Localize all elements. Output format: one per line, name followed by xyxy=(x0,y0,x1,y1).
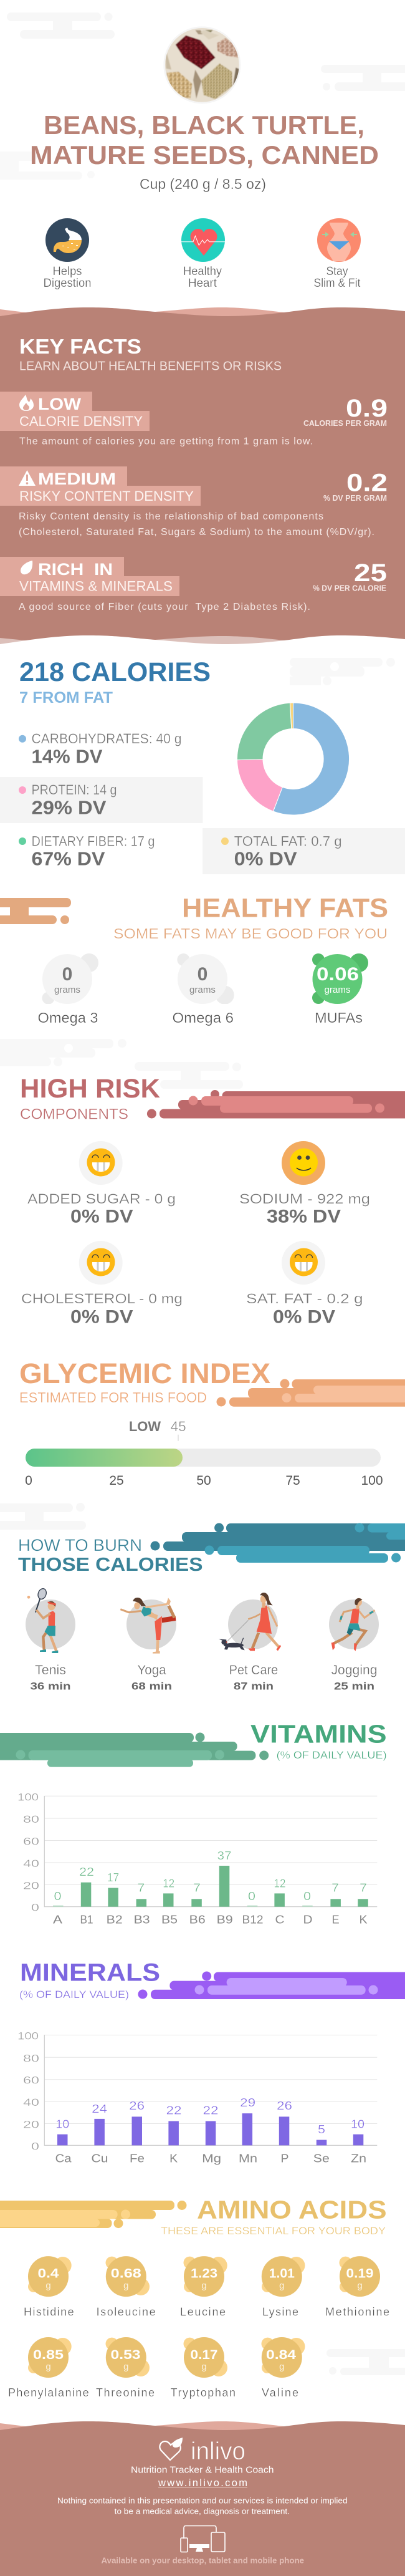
stat: sodium: SODIUM - 922 mg xyxy=(239,1191,370,1207)
chart: vitamins bar chart: 80 xyxy=(23,1813,39,1825)
heading: glycemic index: GLYCEMIC INDEX xyxy=(19,1358,270,1389)
fact: medium risky content density xyxy=(0,466,388,538)
stat: added sugar: ADDED SUGAR - 0 g xyxy=(27,1191,176,1207)
label: yoga xyxy=(131,1663,172,1692)
stat: omega 6 xyxy=(172,953,234,1026)
decorative banner: minerals xyxy=(138,1972,405,1999)
amino acid: histidine: g xyxy=(45,2280,51,2291)
chart: vitamins bar chart: 12 xyxy=(163,1878,174,1890)
fact: medium risky content density: Risky Content density is the relationship of bad components xyxy=(19,511,323,522)
label: jogging: 25 min xyxy=(334,1680,374,1692)
title xyxy=(30,110,379,170)
decorative banner: healthy fats xyxy=(0,898,71,924)
heading: how to burn: HOW TO BURN xyxy=(18,1536,142,1555)
activity: pet care xyxy=(219,1593,281,1651)
amino acid: phenylalanine: g xyxy=(45,2361,51,2372)
logo: heart and leaf xyxy=(160,2438,183,2460)
amino acid: histidine: Histidine xyxy=(24,2305,74,2318)
amino acid: methionine xyxy=(325,2256,389,2318)
decorative banner: burn xyxy=(151,1523,405,1563)
chart: minerals bar chart: 10 xyxy=(55,2118,69,2131)
chart: minerals bar chart: Mn xyxy=(239,2153,257,2165)
icon: smiling face xyxy=(290,1149,318,1176)
label: pet care: 87 min xyxy=(234,1680,274,1692)
chart: vitamins bar chart: B9 xyxy=(217,1914,233,1926)
tagline: Nutrition Tracker & Health Coach xyxy=(131,2465,274,2476)
chart: minerals bar chart: 10 xyxy=(351,2118,364,2131)
stat: carbohydrates: 14% DV xyxy=(31,746,103,768)
fact: medium risky content density: % DV PER GRAM xyxy=(323,494,387,503)
decorative banner: amino acids xyxy=(0,2201,187,2228)
chart: vitamins bar chart: 7 xyxy=(360,1882,367,1894)
chart: minerals bar chart: Ca xyxy=(55,2153,72,2165)
stat: saturated fat: SAT. FAT - 0.2 g xyxy=(246,1291,363,1306)
chart: vitamins bar chart: D xyxy=(303,1914,313,1926)
stat: omega 3 xyxy=(37,953,98,1026)
chart: vitamins bar chart: 7 xyxy=(137,1882,145,1894)
label: tennis xyxy=(30,1663,71,1692)
heading: healthy fats: HEALTHY FATS xyxy=(182,893,388,923)
chart: vitamins bar chart: B1 xyxy=(80,1914,93,1926)
label: pet care: Pet Care xyxy=(229,1663,278,1677)
amino acid: phenylalanine: Phenylalanine xyxy=(8,2386,89,2399)
amino acid: methionine: Methionine xyxy=(325,2305,389,2318)
stat: protein xyxy=(0,777,203,823)
chart: glycemic index gauge: 75 xyxy=(285,1474,300,1488)
label: jogging: Jogging xyxy=(331,1663,378,1677)
fact: low calorie density xyxy=(0,392,388,446)
chart: minerals bar chart: 26 xyxy=(129,2100,145,2112)
fact: low calorie density: 0.9 xyxy=(346,395,388,422)
activity: jogging xyxy=(329,1598,379,1651)
amino acid: lysine: g xyxy=(279,2280,284,2291)
chart: minerals bar chart: 40 xyxy=(23,2096,39,2108)
stat: protein: PROTEIN: 14 g xyxy=(31,782,117,798)
amino acid: phenylalanine: 0.85 xyxy=(33,2348,64,2362)
activity: yoga xyxy=(120,1598,176,1654)
fact: medium risky content density: RISKY CONTENT DENSITY xyxy=(19,488,194,504)
stat: omega 6: 0 xyxy=(198,964,207,985)
note: availability: Available on your desktop, tablet and mobile phone xyxy=(101,2556,304,2565)
fact: medium risky content density: MEDIUM xyxy=(38,470,116,488)
serving size: Cup (240 g / 8.5 oz) xyxy=(140,176,266,192)
amino acid: tryptophan: g xyxy=(201,2361,207,2372)
chart: minerals bar chart: K xyxy=(169,2153,178,2165)
chart: minerals bar chart: Mg xyxy=(202,2153,221,2165)
stat: carbohydrates xyxy=(19,731,182,768)
amino acid: leucine: Leucine xyxy=(180,2305,226,2318)
decorative banner: glycemic index xyxy=(217,1379,405,1407)
stat: omega 3: Omega 3 xyxy=(37,1010,98,1026)
chart: vitamins bar chart: 0 xyxy=(31,1902,39,1914)
heading: those calories: THOSE CALORIES xyxy=(18,1553,203,1575)
fact: rich in vitamins and minerals: VITAMINS & MINERALS xyxy=(19,579,173,594)
chart: minerals bar chart: 5 xyxy=(318,2123,325,2136)
amino acid: tryptophan: 0.17 xyxy=(191,2348,218,2362)
stat: carbohydrates: CARBOHYDRATES: 40 g xyxy=(31,731,182,746)
chart: vitamins bar chart xyxy=(17,1791,377,1926)
decorative cloud: burn xyxy=(0,1503,86,1530)
fact: low calorie density: CALORIE DENSITY xyxy=(19,413,143,429)
chart: vitamins bar chart: 20 xyxy=(23,1879,39,1891)
panel: footer xyxy=(0,2421,405,2576)
chart: minerals bar chart: 24 xyxy=(92,2103,107,2115)
amino acid: valine: Valine xyxy=(262,2386,298,2399)
label: helps digestion: Digestion xyxy=(44,277,91,290)
label: healthy heart: Healthy xyxy=(183,265,222,278)
website link: www.inlivo.com xyxy=(158,2477,247,2489)
chart: vitamins bar chart: B6 xyxy=(189,1914,206,1926)
chart: minerals bar chart: 29 xyxy=(240,2096,255,2109)
disclaimer: Nothing contained in this presentation and our services is intended or implied xyxy=(57,2497,348,2506)
label: stay slim and fit: Slim & Fit xyxy=(314,277,361,290)
heading: vitamins: VITAMINS xyxy=(250,1719,387,1748)
amino acid: histidine xyxy=(24,2256,74,2318)
chart: minerals bar chart: 20 xyxy=(23,2119,39,2130)
stat: protein: 29% DV xyxy=(31,797,107,819)
disclaimer: to be a medical advice, diagnosis or treatment. xyxy=(115,2507,290,2516)
stat: total fat xyxy=(202,828,405,874)
chart: glycemic index gauge: 50 xyxy=(196,1474,211,1488)
heading: key facts: KEY FACTS xyxy=(19,335,141,358)
label: helps digestion: Helps xyxy=(52,265,82,278)
chart: minerals bar chart: 100 xyxy=(17,2030,39,2042)
amino acid: threonine: 0.53 xyxy=(111,2348,141,2362)
label: stay slim and fit xyxy=(314,265,361,290)
amino acid: isoleucine xyxy=(97,2256,156,2318)
label: pet care xyxy=(229,1663,278,1692)
chart: glycemic index gauge: 45 xyxy=(171,1419,186,1434)
amino acid: threonine: g xyxy=(123,2361,128,2372)
stat: MUFAs: grams xyxy=(324,985,350,995)
amino acid: leucine: 1.23 xyxy=(191,2267,217,2281)
chart: vitamins bar chart: 17 xyxy=(107,1871,119,1884)
fact: low calorie density: LOW xyxy=(38,395,82,413)
icon: grinning face xyxy=(87,1248,115,1276)
food photo: bags of beans xyxy=(163,26,241,104)
stat: omega 3: grams xyxy=(54,985,80,995)
chart: vitamins bar chart: 0 xyxy=(248,1890,255,1903)
chart: minerals bar chart: 60 xyxy=(23,2075,39,2086)
stat: omega 6: Omega 6 xyxy=(172,1010,234,1026)
amino acid: tryptophan xyxy=(171,2337,236,2399)
stat: total fat: TOTAL FAT: 0.7 g xyxy=(234,833,342,849)
chart: vitamins bar chart: 100 xyxy=(17,1791,39,1803)
decorative cloud: calories xyxy=(290,658,395,685)
chart: vitamins bar chart: 0 xyxy=(303,1890,311,1903)
chart: minerals bar chart: Se xyxy=(313,2153,330,2165)
chart: vitamins bar chart: K xyxy=(359,1914,368,1926)
chart: minerals bar chart: P xyxy=(280,2153,289,2165)
stat: sodium: 38% DV xyxy=(267,1207,341,1227)
amino acid: methionine: 0.19 xyxy=(346,2267,374,2281)
chart: vitamins bar chart: B5 xyxy=(161,1914,178,1926)
icon: slim and fit xyxy=(317,218,361,262)
amino acid: threonine: Threonine xyxy=(96,2386,155,2399)
fact: low calorie density: CALORIES PER GRAM xyxy=(303,419,387,428)
amino acid: phenylalanine xyxy=(8,2337,89,2399)
label: tennis: Tenis xyxy=(35,1663,66,1677)
stat: added sugar: 0% DV xyxy=(70,1207,133,1227)
stat: MUFAs xyxy=(312,953,368,1026)
chart: minerals bar chart: 26 xyxy=(277,2100,292,2112)
chart: vitamins bar chart: E xyxy=(332,1914,340,1926)
stat: dietary fiber xyxy=(19,833,155,869)
icon: grinning face xyxy=(290,1248,318,1276)
fact: rich in vitamins and minerals: RICH IN xyxy=(38,560,113,579)
chart: minerals bar chart: 22 xyxy=(166,2104,182,2116)
icon: devices xyxy=(181,2525,225,2552)
subheading: estimated: ESTIMATED FOR THIS FOOD xyxy=(19,1389,207,1406)
amino acid: leucine xyxy=(180,2256,227,2318)
chart: glycemic index gauge: LOW xyxy=(129,1419,161,1434)
chart: minerals bar chart: 22 xyxy=(203,2104,218,2116)
chart: vitamins bar chart: C xyxy=(275,1914,284,1926)
chart: vitamins bar chart: 22 xyxy=(79,1866,94,1878)
chart: glycemic index gauge: 25 xyxy=(109,1474,124,1488)
chart: minerals bar chart xyxy=(17,2030,377,2165)
chart: glycemic index gauge: 0 xyxy=(25,1474,32,1488)
fact: medium risky content density: (Cholesterol, Saturated Fat, Sugars & Sodium) to the amount (%DV/gr). xyxy=(19,527,374,538)
subheading: amino acids: THESE ARE ESSENTIAL FOR YOUR BODY xyxy=(161,2225,386,2237)
stat: added sugar xyxy=(27,1141,176,1227)
decorative cloud: behind title xyxy=(0,152,95,180)
amino acid: lysine: 1.01 xyxy=(269,2267,295,2281)
fact: rich in vitamins and minerals xyxy=(0,557,387,612)
decorative cloud: amino acids xyxy=(326,2349,405,2375)
amino acid: lysine: Lysine xyxy=(262,2305,298,2318)
chart: vitamins bar chart: 60 xyxy=(23,1836,39,1847)
subheading: vitamins: (% OF DAILY VALUE) xyxy=(277,1749,387,1761)
amino acid: isoleucine: g xyxy=(123,2280,128,2291)
decorative banner: vitamins xyxy=(0,1732,269,1767)
logo text: inlivo: inlivo xyxy=(191,2438,245,2465)
chart: minerals bar chart: Cu xyxy=(91,2153,108,2165)
subheading: from fat: 7 FROM FAT xyxy=(19,689,113,707)
chart: vitamins bar chart: 40 xyxy=(23,1858,39,1869)
chart: vitamins bar chart: B12 xyxy=(242,1914,263,1926)
chart: macronutrient donut xyxy=(237,703,350,815)
label: healthy heart: Heart xyxy=(188,277,217,290)
stat: sodium xyxy=(239,1141,370,1227)
chart: vitamins bar chart: 37 xyxy=(217,1850,232,1862)
fact: medium risky content density: 0.2 xyxy=(346,469,388,496)
chart: minerals bar chart: Fe xyxy=(130,2153,145,2165)
amino acid: lysine xyxy=(262,2256,305,2318)
stat: saturated fat: 0% DV xyxy=(273,1306,335,1327)
stat: cholesterol: CHOLESTEROL - 0 mg xyxy=(21,1291,183,1306)
icon: grinning face xyxy=(87,1149,115,1176)
stat: cholesterol xyxy=(21,1241,183,1327)
subheading: minerals: (% OF DAILY VALUE) xyxy=(19,1989,129,2000)
icon: healthy heart xyxy=(181,218,225,262)
subheading: healthy fats: SOME FATS MAY BE GOOD FOR YOU xyxy=(113,925,388,942)
title: BEANS, BLACK TURTLE, xyxy=(44,110,364,140)
stat: total fat: 0% DV xyxy=(234,848,297,869)
stat: cholesterol: 0% DV xyxy=(70,1306,133,1327)
decorative cloud: top left xyxy=(7,12,115,39)
amino acid: isoleucine: 0.68 xyxy=(111,2267,141,2281)
title: MATURE SEEDS, CANNED xyxy=(30,140,379,170)
subheading: key facts: LEARN ABOUT HEALTH BENEFITS OR RISKS xyxy=(19,359,282,373)
stat: dietary fiber: 67% DV xyxy=(31,848,105,869)
chart: vitamins bar chart: 0 xyxy=(54,1890,61,1903)
stat: dietary fiber: DIETARY FIBER: 17 g xyxy=(31,833,155,849)
stat: omega 3: 0 xyxy=(62,964,72,985)
activity: tennis xyxy=(26,1588,75,1653)
label: helps digestion xyxy=(44,265,91,290)
chart: glycemic index gauge: 100 xyxy=(361,1474,383,1488)
label: tennis: 36 min xyxy=(30,1680,71,1692)
amino acid: histidine: 0.4 xyxy=(37,2267,59,2281)
fact: rich in vitamins and minerals: % DV PER CALORIE xyxy=(313,584,386,592)
disclaimer xyxy=(57,2497,348,2516)
chart: minerals bar chart: Zn xyxy=(351,2153,366,2165)
label: healthy heart xyxy=(183,265,222,290)
stat: omega 6: grams xyxy=(189,985,216,995)
decorative cloud: top right xyxy=(321,65,405,91)
chart: vitamins bar chart: 7 xyxy=(193,1882,201,1894)
heading: high risk: HIGH RISK xyxy=(20,1074,160,1104)
label: yoga: Yoga xyxy=(137,1663,166,1677)
icon: digestion xyxy=(45,218,89,262)
amino acid: isoleucine: Isoleucine xyxy=(97,2305,156,2318)
chart: vitamins bar chart: B3 xyxy=(134,1914,150,1926)
heading: calories: 218 CALORIES xyxy=(19,657,211,687)
chart: vitamins bar chart: B2 xyxy=(107,1914,123,1926)
stat: saturated fat xyxy=(246,1241,363,1327)
decorative cloud: high risk right xyxy=(135,1062,243,1089)
chart: vitamins bar chart: 7 xyxy=(331,1882,339,1894)
fact: rich in vitamins and minerals: A good source of Fiber (cuts your Type 2 Diabetes Risk). xyxy=(19,602,310,612)
heading: amino acids: AMINO ACIDS xyxy=(197,2195,387,2224)
subheading: components: COMPONENTS xyxy=(20,1106,128,1123)
decorative cloud: high risk left xyxy=(0,1039,126,1066)
amino acid: valine: g xyxy=(279,2361,284,2372)
panel: key facts xyxy=(0,307,405,655)
chart: vitamins bar chart: 12 xyxy=(274,1878,285,1890)
chart: minerals bar chart: 80 xyxy=(23,2052,39,2064)
heading: minerals: MINERALS xyxy=(20,1959,160,1987)
stat: MUFAs: MUFAs xyxy=(315,1010,363,1026)
amino acid: tryptophan: Tryptophan xyxy=(171,2386,236,2399)
chart: vitamins bar chart: A xyxy=(53,1914,62,1926)
chart: minerals bar chart: 0 xyxy=(31,2140,39,2152)
label: yoga: 68 min xyxy=(131,1680,172,1692)
amino acid: threonine xyxy=(96,2337,155,2399)
amino acid: valine xyxy=(262,2337,305,2399)
stat: MUFAs: 0.06 xyxy=(317,964,359,985)
amino acid: valine: 0.84 xyxy=(266,2348,296,2362)
fact: rich in vitamins and minerals: 25 xyxy=(354,559,387,587)
fact: low calorie density: The amount of calories you are getting from 1 gram is low. xyxy=(19,437,313,446)
decorative banner: high risk xyxy=(147,1090,405,1119)
amino acid: leucine: g xyxy=(201,2280,207,2291)
chart: glycemic index gauge xyxy=(25,1419,383,1488)
amino acid: methionine: g xyxy=(357,2280,363,2291)
label: stay slim and fit: Stay xyxy=(326,265,348,278)
label: jogging xyxy=(331,1663,378,1692)
